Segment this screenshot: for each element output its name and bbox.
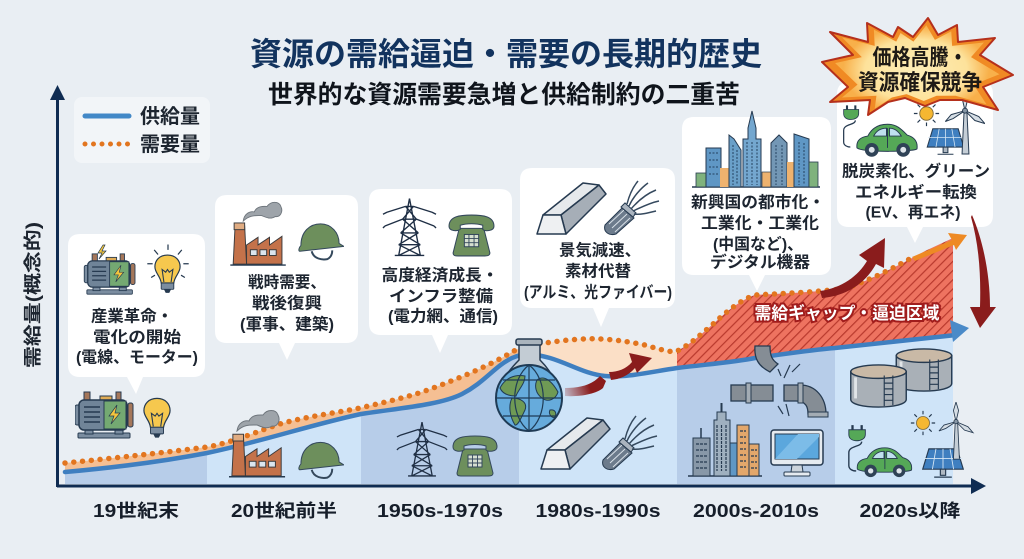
- legend: [74, 97, 210, 163]
- text: 2000s-2010s: デジタル機器: [710, 252, 810, 272]
- icon: tower and telephone: [383, 199, 494, 256]
- y axis arrowhead: [50, 85, 65, 100]
- y axis: [56, 98, 59, 487]
- text: 2000s-2010s: 新興国の都市化・: [691, 192, 825, 212]
- demand dotted line: [65, 256, 915, 463]
- supply line: [65, 335, 956, 472]
- text: 1980s-1990s: [524, 240, 672, 302]
- chart icons: early 20th century: [229, 410, 344, 478]
- subtitle: 世界的な資源需要急増と供給制約の二重苦: [268, 81, 740, 109]
- text: 19th century: (電線、モーター): [76, 348, 198, 366]
- text: 19th century: 産業革命・: [91, 308, 173, 326]
- x axis labels: 20世紀前半: [231, 501, 337, 521]
- demand arrow: [912, 233, 967, 261]
- icon: motor and bulb: [84, 245, 189, 294]
- text: 1980s-1990s: 景気減速、: [559, 240, 641, 260]
- callout text: 価格高騰・: [872, 45, 968, 70]
- text: 2020s onward: (EV、再エネ): [866, 204, 960, 222]
- arrow: demand surge: [820, 238, 885, 298]
- chart icons: 19th century: [75, 392, 170, 438]
- gap zone label: 需給ギャップ・逼迫区域: [754, 304, 940, 323]
- panel: 1980s-1990s: [520, 168, 675, 327]
- icon: flask and globe: [496, 339, 562, 431]
- chart icons: storage tanks: [851, 349, 952, 407]
- callout text: 資源確保競争: [858, 70, 982, 95]
- text: 2000s-2010s: 工業化・工業化: [701, 214, 819, 232]
- panel: 19th century: [68, 234, 205, 394]
- arrow: price pressure: [970, 215, 996, 328]
- period bands: [65, 338, 953, 484]
- text: 2000s-2010s: (中国など)、: [713, 236, 803, 254]
- chart: supply and demand curves: [65, 230, 969, 486]
- y axis label: 需給量(概念的): [23, 222, 43, 368]
- legend: 需要量: [140, 133, 200, 156]
- legend: 供給量: [140, 105, 200, 128]
- text: 2000s-2010s: [691, 192, 825, 272]
- title: 資源の需給逼迫・需要の長期的歴史: [250, 36, 762, 72]
- x axis: [57, 484, 974, 488]
- x axis labels: [93, 501, 960, 521]
- icon: ingot and optical fiber: [537, 181, 659, 235]
- text: early 20th century: (軍事、建築): [240, 314, 334, 334]
- text: early 20th century: [240, 272, 334, 334]
- chart icons: 1950s-1970s: [397, 422, 497, 476]
- panel: 2000s-2010s: [682, 111, 831, 291]
- callout text: [858, 45, 982, 95]
- chart icons: green energy: [849, 402, 973, 477]
- text: 1950s-1970s: [382, 266, 498, 326]
- x axis arrowhead: [971, 478, 986, 494]
- x axis labels: 2020s以降: [860, 501, 960, 521]
- x axis labels: 2000s-2010s: [693, 501, 819, 521]
- text: 19th century: [76, 308, 198, 366]
- x axis labels: 1950s-1970s: [377, 501, 503, 521]
- text: 1980s-1990s: (アルミ、光ファイバー): [524, 284, 672, 302]
- icon: skyline: [692, 111, 820, 187]
- arrow: disrupted trend: [565, 353, 652, 396]
- panel: early 20th century: [215, 195, 358, 360]
- text: early 20th century: 戦後復興: [252, 294, 322, 312]
- panel: 2020s onward: [837, 82, 993, 243]
- supply arrowhead: [950, 320, 969, 342]
- text: 1980s-1990s: 素材代替: [565, 262, 631, 280]
- text: 19th century: 電化の開始: [93, 328, 181, 346]
- icon: factory and helmet: [230, 202, 344, 265]
- text: 1950s-1970s: 高度経済成長・: [382, 266, 498, 284]
- text: 1950s-1970s: インフラ整備: [389, 288, 493, 306]
- chart icons: pipe: [731, 346, 828, 417]
- chart icons: city and monitor: [688, 403, 823, 476]
- demand surplus area: [65, 230, 953, 486]
- text: 2020s onward: 脱炭素化、グリーン: [842, 162, 990, 180]
- callout: price surge burst: [822, 18, 1013, 115]
- icon: green energy: [844, 88, 985, 157]
- text: 1950s-1970s: (電力網、通信): [388, 306, 498, 326]
- text: early 20th century: 戦時需要、: [248, 272, 326, 292]
- text: 2020s onward: [842, 162, 990, 222]
- chart icons: ingot and fiber: [541, 416, 657, 470]
- x axis labels: 19世紀末: [93, 501, 179, 521]
- panel: 1950s-1970s: [369, 189, 512, 353]
- x axis labels: 1980s-1990s: [536, 501, 660, 521]
- text: 2020s onward: エネルギー転換: [855, 184, 977, 202]
